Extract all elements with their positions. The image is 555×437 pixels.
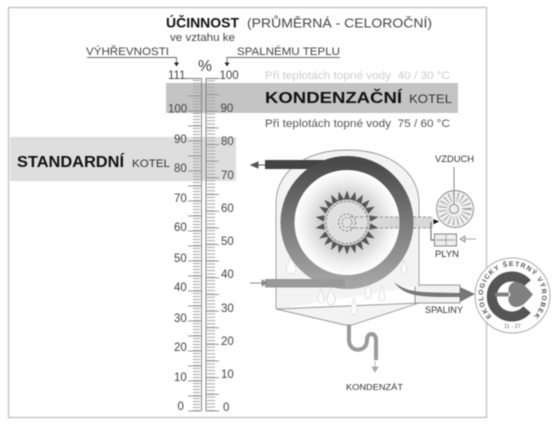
label: spalnemu teplu with arrow [224,45,340,66]
subtitle: ve vztahu ke: ve vztahu ke [170,32,235,44]
title: ÚČINNOST [166,16,240,30]
condensate drops [286,258,407,315]
scale labels: left (vyhrevnost): 0 [178,401,184,413]
scale labels: left (vyhrevnost): 111 [168,70,185,82]
siphon [349,325,376,360]
bottom return pipe [265,279,345,288]
air label: VZDUCH [435,154,474,164]
label: spalnemu teplu with arrow: SPALNÉMU TEPLU [237,45,340,58]
band: kondenzacni [166,83,458,113]
badge ring text path [483,266,542,316]
scale labels: left (vyhrevnost): 70 [174,193,187,205]
scale labels: right (spalne teplo): 80 [221,136,234,148]
text: temperature 40/30: Při teplotách topné vody 40 / 30 °C [265,70,450,82]
gas valve [431,220,476,246]
scale labels: right (spalne teplo): 100 [220,70,239,82]
fan [436,167,474,228]
combustion chamber [294,170,400,276]
label: vyhrevnosti with arrow [86,45,179,66]
flow arrow in [250,280,267,286]
scale labels: right (spalne teplo): 30 [221,303,234,315]
scale labels: right (spalne teplo): 0 [223,402,229,414]
scale labels: right (spalne teplo) [220,70,239,414]
scale labels: right (spalne teplo): 20 [221,336,234,348]
badge number: 11 - 27 [504,324,521,330]
badge circular label: EKOLOGICKY ŠETRNÝ VÝROBEK [478,260,548,320]
heading: kondenzacni kotel: KOTEL [409,94,453,106]
label: vyhrevnosti with arrow: VÝHŘEVNOSTI [86,45,169,58]
flue gas label: SPALINY [425,305,463,315]
burner flames [315,190,379,254]
scale labels: right (spalne teplo): 50 [221,236,234,248]
boiler diagram [250,150,476,392]
scale labels: left (vyhrevnost): 60 [174,222,187,234]
scale labels: left (vyhrevnost): 50 [174,253,187,265]
heat exchanger ring [288,163,406,282]
scale labels: right (spalne teplo): 70 [221,170,234,182]
text: temperature 75/60: Při teplotách topné vody 75 / 60 °C [265,118,450,130]
top hot water pipe [265,160,340,169]
heading: kondenzacni kotel [265,89,453,107]
flow arrow out [251,162,265,168]
heading: standardni kotel: KOTEL [132,158,170,170]
title [166,16,432,30]
flue gas arrow [394,282,475,302]
condensate arrow [372,361,378,372]
scale labels: left (vyhrevnost): 10 [174,372,187,384]
scale: thermometer [183,78,219,412]
heading: standardni kotel [17,154,170,171]
percent sign: % [198,58,212,75]
scale labels: left (vyhrevnost): 90 [174,134,187,146]
badge C mark [492,276,527,316]
burner tube [373,217,433,228]
burner dashed circles [326,202,433,244]
condensate label: KONDENZÁT [346,382,403,392]
gas label: PLYN [435,249,459,259]
scale labels: right (spalne teplo): 90 [220,103,233,115]
scale labels: right (spalne teplo): 10 [221,369,234,381]
flue gas channel [415,285,460,303]
scale labels: right (spalne teplo): 60 [221,203,234,215]
scale labels: right (spalne teplo): 40 [221,269,234,281]
scale labels: left (vyhrevnost): 20 [174,342,187,354]
title: (PRŮMĚRNÁ - CELOROČNÍ) [247,16,432,30]
badge leaf mark [495,282,533,307]
scale labels: left (vyhrevnost): 40 [174,282,187,294]
heading: kondenzacni kotel: KONDENZAČNÍ [265,89,403,107]
scale labels: left (vyhrevnost) [168,70,187,413]
eco badge [474,257,551,334]
scale labels: left (vyhrevnost): 30 [174,313,187,325]
scale labels: left (vyhrevnost): 80 [174,163,187,175]
scale labels: left (vyhrevnost): 100 [168,104,187,116]
heading: standardni kotel: STANDARDNÍ [17,154,125,171]
band: standardni [10,137,236,181]
boiler housing [276,150,419,325]
